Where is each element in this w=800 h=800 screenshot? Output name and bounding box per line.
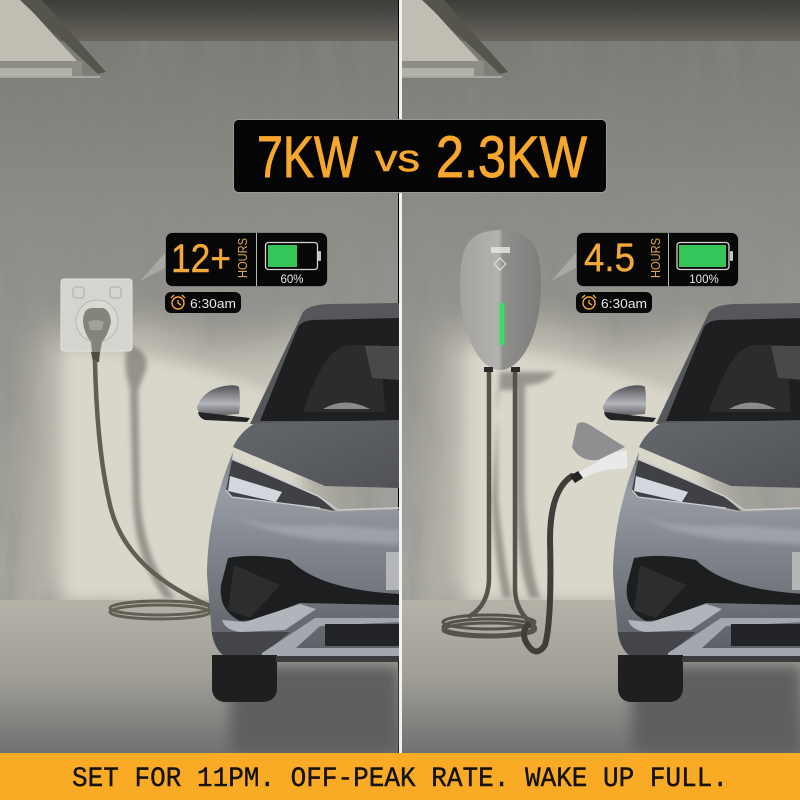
icon: alarm clock (171, 295, 185, 309)
car: left (197, 303, 400, 702)
number: 4.5: 4.5 (584, 236, 635, 280)
label: hours: HOURS (236, 238, 250, 278)
alarm pill: right (576, 292, 652, 313)
charger shadow (492, 372, 555, 598)
icon: alarm clock (582, 295, 596, 309)
charging connector (570, 422, 627, 483)
icon: wall socket (61, 279, 132, 362)
number: 12+: 12+ (171, 237, 231, 281)
panel: left 2.3kW socket scene (0, 0, 400, 754)
title: 7KW: 7KW (257, 125, 358, 190)
icon: battery 100% (677, 242, 733, 270)
alarm pill: left (165, 292, 241, 313)
car: right (603, 303, 800, 702)
banner text: SET FOR 11PM. OFF-PEAK RATE. WAKE UP FULL. (72, 764, 728, 795)
background: left garage wall and floor (0, 0, 400, 754)
icon: wallbox charger (460, 230, 541, 372)
label: wake time: 6:30am (190, 296, 236, 311)
label: 60%: 60% (280, 274, 304, 286)
charging cable and coil (95, 362, 210, 619)
icon: battery 60% (266, 242, 321, 270)
label: 100%: 100% (689, 274, 719, 286)
divider (399, 0, 402, 754)
panel: right 7kW wallbox scene (402, 0, 800, 754)
title badge (234, 120, 606, 192)
title: 2.3KW: 2.3KW (436, 125, 587, 190)
charging cables and coil (443, 370, 572, 651)
label: hours: HOURS (649, 238, 663, 278)
bottom banner (0, 753, 800, 800)
wall socket shadow (125, 345, 175, 598)
callout pointer: left (140, 253, 165, 281)
label: wake time: 6:30am (601, 296, 647, 311)
callout pointer: right (551, 253, 576, 281)
background: right garage wall and floor (402, 0, 800, 754)
callout: right 4.5 hours (576, 232, 738, 286)
callout: left 12+ hours (166, 232, 328, 286)
title: vs: vs (375, 138, 420, 180)
